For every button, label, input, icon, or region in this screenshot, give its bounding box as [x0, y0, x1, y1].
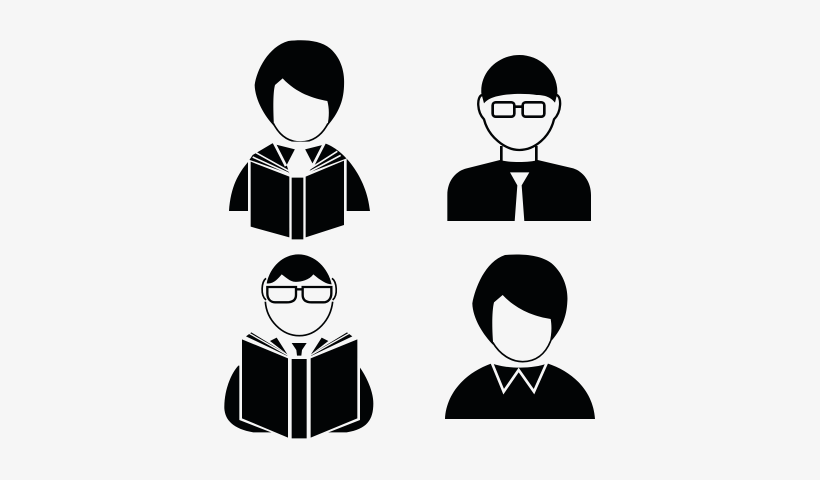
- book left cover: [242, 339, 288, 438]
- hair: [472, 254, 567, 345]
- book left cover: [251, 162, 289, 237]
- torso: [445, 363, 595, 419]
- icon: man with glasses and tie: [447, 55, 591, 221]
- book spine: [292, 178, 303, 239]
- tie: [292, 343, 307, 356]
- glasses: [493, 102, 544, 117]
- hair: [267, 254, 332, 284]
- face and ears outline: [478, 95, 560, 150]
- hair: [255, 40, 344, 126]
- book backing: [239, 337, 360, 440]
- body: [224, 366, 373, 432]
- body: [229, 143, 370, 211]
- book pages: [246, 332, 352, 356]
- hair: [481, 55, 557, 103]
- neck: [501, 146, 536, 162]
- tie: [510, 172, 529, 221]
- face outline: [273, 123, 328, 142]
- ears: [262, 278, 336, 300]
- book right cover: [306, 161, 344, 237]
- book right cover: [311, 339, 357, 438]
- icon: person with hair and collar: [445, 254, 595, 419]
- page divider lines: [247, 332, 351, 356]
- collar band: [275, 142, 325, 149]
- book pages: [253, 151, 341, 174]
- torso: [447, 160, 591, 221]
- book spine: [292, 359, 307, 438]
- icon: man with glasses reading a book: [224, 254, 373, 440]
- book backing: [248, 158, 347, 241]
- face outline: [493, 341, 551, 362]
- icon: person with hair reading a book: [229, 40, 370, 241]
- collar: [492, 362, 547, 392]
- jacket lapels: [270, 338, 328, 354]
- face outline: [265, 302, 333, 336]
- glasses: [267, 287, 331, 302]
- white shirt front: [287, 149, 313, 175]
- collar edges: [274, 141, 325, 166]
